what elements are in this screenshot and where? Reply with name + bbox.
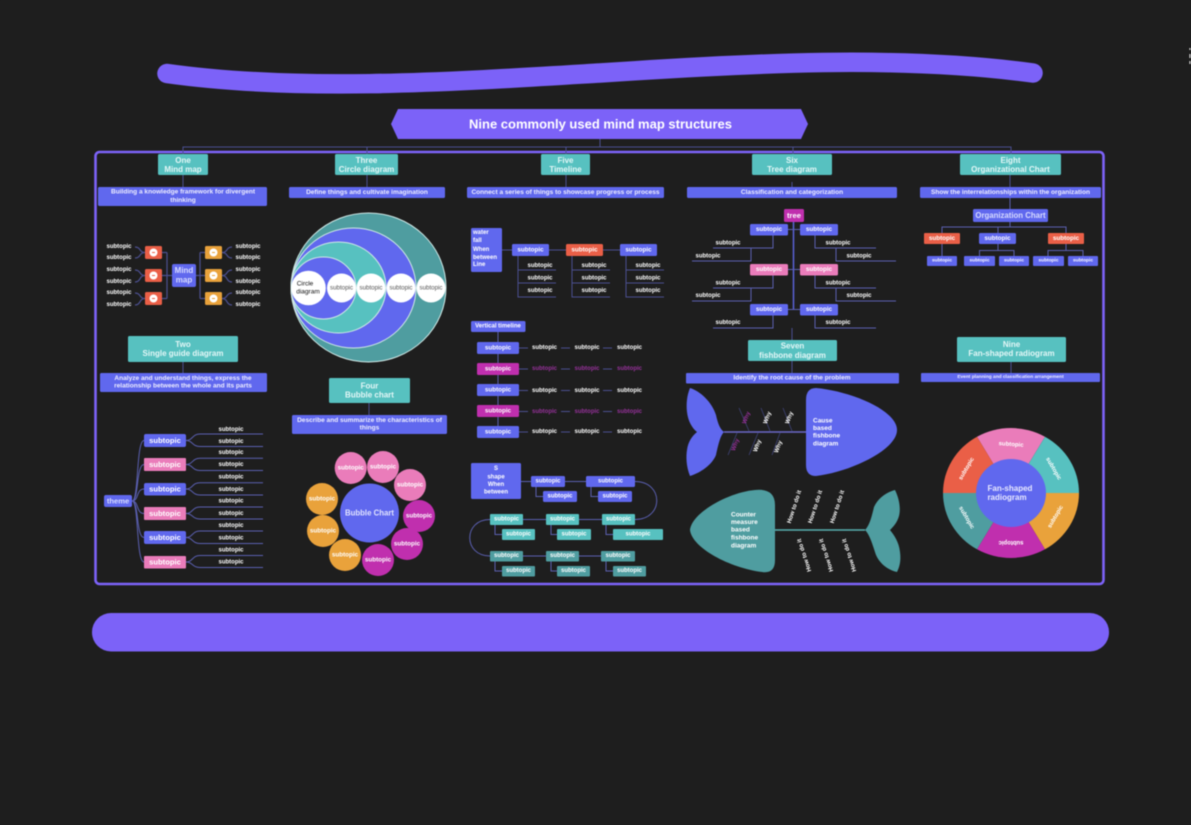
description: three: Define things and cultivate imagination [306,189,428,196]
heading: one: One [175,156,191,165]
circle diagram: subtopic [359,284,383,292]
panel: seven fishbone diagram [686,328,900,572]
heading: nine: Fan-shaped radiogram [968,349,1055,358]
organization chart: subtopic [1073,258,1093,264]
S-shaped timeline: subtopic [494,516,520,522]
S-shaped timeline: between [484,490,508,496]
heading: eight: Eight [1000,156,1021,165]
fan-shaped radiogram: subtopic [998,441,1024,449]
heading: five: Timeline [549,165,582,174]
waterfall timeline: subtopic [528,263,553,269]
fishbone: countermeasure based: How to do it [819,538,835,572]
decorative bar: bottom [92,613,1109,652]
frame panel [96,152,1104,584]
tree diagram [692,209,896,328]
circle diagram [291,213,446,362]
bubble chart: subtopic [332,552,359,558]
description: two: Analyze and understand things, express the [114,375,252,382]
fishbone: cause based: Why [753,438,763,453]
heading: four: Bubble chart [345,390,394,400]
panel: four bubble chart [292,378,447,576]
vertical timeline: subtopic [617,429,643,435]
single guide diagram: subtopic [218,439,244,445]
fan-shaped radiogram: subtopic [1047,504,1065,529]
fishbone: cause based: Why [763,410,773,425]
S-shaped timeline: subtopic [606,516,632,522]
heading: four [329,378,410,403]
mind map diagram: subtopic [236,255,261,261]
vertical timeline: subtopic [485,408,512,414]
vertical timeline: subtopic [574,409,600,415]
heading: seven: fishbone diagram [759,351,826,360]
fishbone: countermeasure based: based [731,526,750,534]
organization chart: subtopic [1038,258,1059,264]
description: four [292,415,447,434]
fishbone: cause based: diagram [813,440,839,448]
S-shaped timeline [470,463,663,576]
vertical timeline: subtopic [617,388,643,394]
mind map diagram: map [176,276,192,284]
vertical timeline: subtopic [532,345,558,351]
description: five [467,187,664,198]
single guide diagram: subtopic [149,436,181,445]
tree diagram: subtopic [716,320,741,326]
mind map diagram [106,244,261,308]
mind map diagram: subtopic [106,279,132,285]
fan-shaped radiogram: radiogram [987,493,1027,502]
fishbone: cause based: Cause [813,418,833,424]
organization chart: subtopic [1053,235,1080,242]
heading: one: Mind map [164,165,202,174]
circle diagram: subtopic [389,284,413,292]
description: two: relationship between the whole and its parts [114,382,252,390]
heading: nine [957,337,1066,362]
S-shaped timeline: subtopic [550,553,576,559]
S-shaped timeline: subtopic [617,568,643,574]
vertical timeline: subtopic [617,345,643,351]
fishbone: cause based: Why [731,437,741,452]
single guide diagram: subtopic [149,509,181,518]
waterfall timeline: subtopic [582,288,607,294]
fan-shaped radiogram: subtopic [958,456,976,481]
tree diagram: subtopic [846,254,872,260]
heading: six: Tree diagram [767,165,817,174]
description: seven [686,373,899,384]
waterfall timeline: subtopic [528,288,553,294]
single guide diagram: subtopic [218,427,244,433]
fan-shaped radiogram: Fan-shaped [988,484,1033,493]
heading: two: Two [175,340,191,349]
fishbone: countermeasure based: measure [731,519,758,526]
vertical timeline: subtopic [532,366,558,372]
tree diagram: subtopic [806,266,833,273]
vertical timeline: subtopic [485,366,512,372]
S-shaped timeline: subtopic [602,494,628,500]
vertical timeline: subtopic [574,366,600,372]
panel: three circle diagram [289,154,446,362]
panel: one mind map [98,154,267,308]
tree diagram: subtopic [716,240,741,246]
description: five: Connect a series of things to showcase progress or process [471,189,660,196]
description: four: things [360,424,380,432]
circle diagram: subtopic [419,284,443,292]
single guide diagram: subtopic [149,484,181,494]
fishbone: countermeasure based: fishbone [731,534,758,542]
circle diagram: diagram [296,288,320,296]
heading: seven [748,340,837,361]
heading: two: Single guide diagram [143,349,223,358]
tree diagram: subtopic [806,226,833,233]
single guide diagram: subtopic [218,560,244,566]
mind map diagram: subtopic [106,267,132,273]
S-shaped timeline: subtopic [626,532,651,538]
bubble chart: subtopic [338,464,364,472]
mind map diagram: Mind [175,266,193,275]
single guide diagram: subtopic [218,536,244,542]
S-shaped timeline: subtopic [598,478,624,484]
organization chart: Organization Chart [975,211,1046,220]
vertical timeline: subtopic [532,429,558,435]
organization chart [924,198,1098,266]
vertical timeline: subtopic [574,345,600,351]
single guide diagram: subtopic [218,450,244,456]
fishbone: countermeasure based: How to do it [808,490,824,524]
waterfall timeline: subtopic [571,246,598,254]
S-shaped timeline: subtopic [561,568,587,574]
circle diagram: subtopic [330,284,353,292]
vertical timeline: subtopic [574,429,600,435]
description: three [289,187,445,198]
waterfall timeline: between [473,255,497,261]
description: eight [920,187,1101,198]
S-shaped timeline: subtopic [550,516,576,522]
bubble chart: subtopic [394,540,421,548]
mind map diagram: subtopic [106,302,132,308]
mind map diagram: subtopic [236,267,261,273]
heading: six: Six [786,156,799,165]
waterfall timeline: subtopic [517,246,544,254]
mind map diagram: subtopic [236,302,261,308]
heading: five [541,154,590,175]
heading: eight: Organizational Chart [971,165,1050,174]
tree diagram: subtopic [826,240,851,246]
heading: three [335,154,398,175]
fishbone: cause based: Why [785,410,795,425]
fishbone: cause based: Why [774,439,784,454]
description: four: Describe and summarize the characteristics of [297,417,443,424]
single guide diagram: theme [107,496,129,506]
fishbone: countermeasure based: How to do it [797,538,813,572]
waterfall timeline: Line [473,262,486,268]
organization chart: subtopic [929,235,956,242]
single guide diagram: subtopic [218,523,244,529]
waterfall timeline: subtopic [636,288,661,294]
bubble chart: subtopic [397,482,424,488]
single guide diagram: subtopic [218,474,244,480]
vertical timeline: subtopic [532,409,558,415]
S-shaped timeline: subtopic [506,568,532,574]
waterfall timeline: subtopic [636,276,661,282]
mind map diagram: subtopic [236,279,261,285]
bubble chart: subtopic [370,464,397,470]
tree diagram: subtopic [756,266,783,273]
single guide diagram: subtopic [149,460,181,469]
heading: three: Circle diagram [339,165,394,174]
S-shaped timeline: subtopic [506,532,532,538]
fishbone: countermeasure based: diagram [731,542,757,550]
title connectors [183,139,1011,154]
single guide diagram [104,427,263,568]
tree diagram: tree [787,211,801,220]
description: six: Classification and categorization [741,189,843,196]
waterfall timeline: water [472,230,489,236]
bubble chart: subtopic [365,556,392,564]
fan-shaped radiogram: subtopic [998,539,1024,545]
bubble chart [306,451,435,576]
heading: three: Three [356,156,378,165]
single guide diagram: subtopic [149,558,181,566]
tree diagram: subtopic [756,306,783,313]
waterfall timeline: subtopic [636,263,661,269]
S-shaped timeline: S [494,466,498,472]
description: nine: Event planning and classification arrangement [957,374,1064,380]
vertical timeline: subtopic [617,366,643,372]
vertical timeline: subtopic [617,409,643,415]
heading: one [158,154,208,175]
single guide diagram: subtopic [218,487,244,493]
heading: five: Five [557,156,574,165]
decorative brush stroke: top [167,62,1033,84]
heading: six [752,154,832,175]
vertical timeline [471,321,643,438]
panel: two single guide diagram [100,336,267,568]
organization chart: subtopic [1004,258,1024,264]
mind map diagram: subtopic [236,290,261,296]
fishbone: cause based: Why [742,410,752,425]
heading: two [128,336,238,362]
organization chart: subtopic [984,235,1011,242]
waterfall timeline [471,228,664,297]
vertical timeline: subtopic [574,388,600,394]
fishbone: cause based: based [813,425,832,432]
description: two [100,373,267,392]
fishbone: countermeasure based: Counter [731,512,756,518]
fishbone: cause based [686,388,897,476]
fishbone: countermeasure based: How to do it [787,490,803,524]
panel: five timeline [467,154,664,576]
tree diagram: subtopic [696,293,721,299]
heading: four: Four [361,382,378,390]
waterfall timeline: When [473,247,490,253]
mind map diagram: subtopic [106,244,132,250]
description: nine [921,373,1100,382]
S-shaped timeline: shape [487,474,505,480]
tree diagram: subtopic [826,280,851,286]
tree diagram: subtopic [826,320,851,326]
vertical timeline: subtopic [485,428,512,436]
S-shaped timeline: subtopic [548,494,573,500]
description: one [98,187,267,206]
mind map diagram: subtopic [106,290,132,296]
tree diagram: subtopic [716,280,741,286]
fan-shaped radiogram [943,428,1079,558]
waterfall timeline: subtopic [625,246,652,254]
description: six [687,187,897,198]
panel: six tree diagram [687,154,897,328]
tree diagram: subtopic [846,293,872,299]
bubble chart: subtopic [310,528,337,534]
description: one: thinking [170,197,196,204]
single guide diagram: subtopic [149,533,181,542]
S-shaped timeline: When [488,482,504,488]
waterfall timeline: fall [473,238,482,244]
heading: seven: Seven [781,342,804,350]
description: eight: Show the interrelationships within the organization [931,189,1090,196]
fishbone: countermeasure based [690,490,900,572]
S-shaped timeline: subtopic [606,553,631,559]
fishbone: cause based: fishbone [813,432,840,440]
fan-shaped radiogram: subtopic [957,506,975,531]
S-shaped timeline: subtopic [494,553,520,559]
bubble chart: subtopic [406,512,433,520]
bubble chart: Bubble Chart [345,508,394,518]
mind map diagram: subtopic [106,255,132,261]
single guide diagram: subtopic [218,462,244,468]
vertical timeline: subtopic [485,386,512,394]
heading: eight [960,154,1061,175]
heading: nine: Nine [1003,340,1021,349]
waterfall timeline: subtopic [582,276,607,282]
organization chart: subtopic [970,258,990,264]
description: seven: Identify the root cause of the problem [733,374,851,382]
edge marks [1189,48,1191,64]
fan-shaped radiogram: subtopic [1044,457,1062,482]
title [391,109,808,139]
title: Nine commonly used mind map structures [469,116,732,132]
vertical timeline: subtopic [532,388,558,394]
tree diagram: subtopic [696,254,721,260]
panel: nine fan-shaped radiogram [921,337,1100,558]
vertical timeline: subtopic [485,344,512,352]
fishbone: countermeasure based: How to do it [830,490,846,524]
S-shaped timeline: subtopic [536,478,561,484]
circle diagram: Circle [297,280,314,288]
single guide diagram: subtopic [218,511,244,517]
single guide diagram: subtopic [218,498,244,504]
S-shaped timeline: subtopic [562,532,587,538]
panel: eight organizational chart [920,154,1101,266]
waterfall timeline: subtopic [582,263,607,269]
description: one: Building a knowledge framework for divergent [111,188,256,196]
organization chart: subtopic [932,258,952,264]
tree diagram: subtopic [756,226,783,233]
bubble chart: subtopic [309,496,336,502]
single guide diagram: subtopic [218,548,244,554]
tree diagram: subtopic [806,306,833,313]
waterfall timeline: subtopic [528,276,553,282]
mind map diagram: subtopic [236,244,261,250]
vertical timeline: Vertical timeline [475,324,522,330]
fishbone: countermeasure based: How to do it [842,538,858,572]
